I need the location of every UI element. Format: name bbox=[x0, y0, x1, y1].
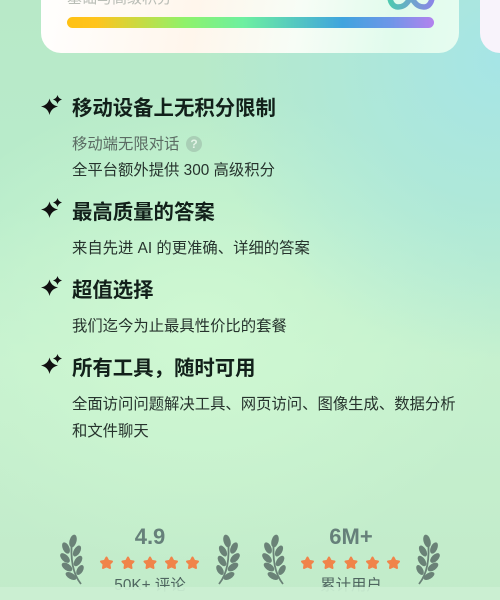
icon: infinity bbox=[388, 0, 434, 10]
text: 全平台额外提供 300 高级积分 bbox=[72, 162, 275, 179]
heading: 最高质量的答案 bbox=[72, 202, 215, 224]
heading: 移动设备上无积分限制 bbox=[72, 98, 276, 120]
stat: users bbox=[262, 524, 440, 594]
text: 全面访问问题解决工具、网页访问、图像生成、数据分析 bbox=[72, 396, 456, 413]
gradient progress bar bbox=[67, 17, 434, 28]
rating number: 4.9 bbox=[135, 524, 165, 549]
bottom fade bar bbox=[0, 587, 500, 600]
icon: help: ? bbox=[190, 137, 198, 151]
text: 移动端无限对话 bbox=[72, 136, 179, 153]
panel: plan card bbox=[41, 0, 459, 53]
label: 50K+ 评论 bbox=[114, 577, 186, 594]
feature: tools bbox=[41, 354, 456, 440]
icon: left laurel bbox=[60, 534, 84, 584]
text: 来自先进 AI 的更准确、详细的答案 bbox=[72, 240, 310, 257]
text: 我们迄今为止最具性价比的套餐 bbox=[72, 318, 287, 335]
icon: sparkle bbox=[41, 95, 62, 115]
icon: sparkle bbox=[41, 198, 62, 218]
heading: 超值选择 bbox=[72, 280, 154, 302]
icon: right laurel bbox=[216, 534, 240, 584]
heading: 所有工具，随时可用 bbox=[72, 358, 256, 380]
icon: left laurel bbox=[262, 534, 286, 584]
label: 累计用户 bbox=[320, 577, 382, 594]
panel: next card edge bbox=[480, 0, 500, 53]
icon: sparkle bbox=[41, 354, 62, 374]
text: 和文件聊天 bbox=[72, 423, 149, 440]
feature: value bbox=[41, 276, 287, 335]
stat: rating bbox=[60, 524, 240, 594]
icon: sparkle bbox=[41, 276, 62, 296]
stars bbox=[301, 556, 400, 569]
icon: help bbox=[186, 136, 202, 152]
stars bbox=[100, 556, 199, 569]
users number: 6M+ bbox=[329, 524, 373, 549]
icon: right laurel bbox=[416, 534, 440, 584]
feature: mobile bbox=[41, 95, 276, 179]
feature: quality bbox=[41, 198, 310, 257]
